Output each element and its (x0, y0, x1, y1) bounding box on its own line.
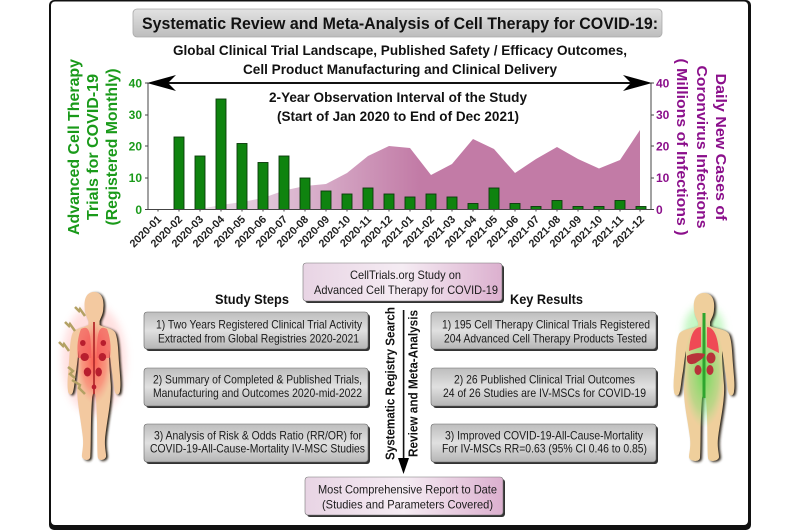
box: result 2 (431, 368, 658, 408)
left axis title: Trials for COVID-19 (85, 74, 102, 220)
month labels: 2021-09 (548, 214, 584, 250)
right axis numbers (656, 76, 670, 217)
month labels: 2021-03 (422, 214, 458, 250)
box: step 3: COVID-19-All-Cause-Mortality IV-MSC Studies (150, 442, 365, 456)
right axis title (673, 58, 729, 236)
month labels: 2020-12 (359, 214, 395, 250)
label: review and meta-analysis: Review and Meta-Analysis (406, 310, 420, 457)
right axis numbers: 40 (656, 76, 670, 90)
organs (687, 327, 719, 375)
box: result 3: 3) Improved COVID-19-All-Cause-Mortality (445, 428, 643, 442)
box: result 3: For IV-MSCs RR=0.63 (95% CI 0.46 to 0.85) (442, 442, 647, 456)
heading: key results: Key Results (510, 291, 583, 307)
left axis numbers: 20 (129, 140, 142, 154)
arrow: review flow (398, 310, 409, 474)
box: step 2 (144, 368, 370, 408)
left axis numbers (129, 76, 142, 217)
left axis numbers: 40 (129, 76, 142, 90)
box: step 2: Manufacturing and Outcomes 2020-mid-2022 (153, 386, 362, 400)
inflamed organs (80, 340, 106, 390)
box: result 2: 24 of 26 Studies are IV-MSCs for COVID-19 (443, 386, 646, 400)
subtitle: Global Clinical Trial Landscape, Published Safety / Efficacy Outcomes, (173, 42, 627, 58)
right axis numbers: 20 (656, 140, 670, 154)
icon: treated human body (674, 293, 736, 462)
month labels: 2020-06 (233, 214, 269, 250)
title (133, 9, 662, 37)
month labels: 2021-06 (485, 214, 521, 250)
box: step 2: 2) Summary of Completed & Published Trials, (153, 372, 362, 386)
month labels: 2020-05 (212, 214, 248, 250)
box: study source (303, 263, 504, 303)
box: step 1: Extracted from Global Registries 2020-2021 (158, 332, 359, 346)
right axis numbers: 30 (656, 108, 670, 122)
left axis title: (Registered Monthly) (104, 68, 121, 226)
box: result 3 (431, 424, 658, 464)
arrow: two-year interval (147, 75, 652, 91)
month labels: 2021-05 (464, 214, 500, 250)
box: conclusion: (Studies and Parameters Covered) (322, 498, 493, 512)
month labels: 2021-12 (611, 214, 647, 250)
box: conclusion: Most Comprehensive Report to Date (318, 482, 497, 496)
observation interval label: (Start of Jan 2020 to End of Dec 2021) (277, 108, 519, 124)
month labels: 2020-01 (128, 214, 164, 250)
right axis title: Coronvirus Infections (693, 66, 710, 228)
month labels: 2020-02 (149, 214, 185, 250)
inflamed torso (75, 320, 113, 404)
observation interval label: 2-Year Observation Interval of the Study (269, 89, 527, 105)
right axis title: Daily New Cases of (712, 74, 729, 222)
box: result 1: 1) 195 Cell Therapy Clinical Trials Registered (442, 318, 650, 332)
box: step 1 (144, 312, 370, 351)
box: study source: Advanced Cell Therapy for COVID-19 (314, 283, 498, 297)
green treated torso (683, 318, 725, 428)
right axis numbers: 0 (656, 203, 663, 217)
month labels: 2021-01 (380, 214, 416, 250)
left axis title: Advanced Cell Therapy (66, 59, 83, 235)
month labels: 2020-04 (191, 214, 227, 250)
left axis numbers: 30 (129, 108, 142, 122)
month labels: 2021-02 (401, 214, 437, 250)
label: systematic registry search: Systematic Registry Search (382, 307, 398, 460)
month labels: 2021-11 (590, 214, 626, 250)
left axis title (66, 59, 121, 235)
month labels: 2020-09 (296, 214, 332, 250)
month labels: 2021-08 (527, 214, 563, 250)
box: conclusion (305, 477, 505, 517)
box: step 3: 3) Analysis of Risk & Odds Ratio (RR/OR) for (154, 428, 362, 442)
observation interval label (269, 89, 527, 124)
chart: monthly trials and daily new cases (128, 76, 670, 250)
month labels: 2021-07 (506, 214, 542, 250)
month labels: 2021-04 (443, 214, 479, 250)
month labels: 2020-07 (254, 214, 290, 250)
title: Systematic Review and Meta-Analysis of Cell Therapy for COVID-19: (142, 15, 658, 33)
left axis numbers: 0 (135, 203, 142, 217)
box: study source: CellTrials.org Study on (350, 268, 461, 282)
right axis numbers: 10 (656, 171, 670, 185)
bar chart: registered trials (174, 99, 646, 210)
box: step 1: 1) Two Years Registered Clinical Trial Activity (156, 318, 362, 332)
left axis numbers: 10 (129, 171, 142, 185)
area chart: daily new cases (179, 130, 640, 210)
subtitle: Cell Product Manufacturing and Clinical Delivery (243, 61, 557, 77)
icon: infected human body (59, 292, 126, 461)
axes (145, 83, 654, 212)
month labels: 2020-11 (338, 214, 374, 250)
month labels (128, 214, 647, 250)
virus spikes (59, 307, 85, 394)
month labels: 2020-03 (170, 214, 206, 250)
box: step 3 (144, 424, 370, 464)
right axis title: ( Millions of Infections ) (673, 58, 690, 236)
box: result 1: 204 Advanced Cell Therapy Products Tested (444, 332, 647, 346)
box: result 2: 2) 26 Published Clinical Trial Outcomes (454, 372, 635, 386)
box: result 1 (431, 312, 658, 351)
month labels: 2021-10 (569, 214, 605, 250)
month labels: 2020-10 (317, 214, 353, 250)
subtitle (173, 42, 627, 77)
heading: study steps: Study Steps (215, 291, 289, 307)
month labels: 2020-08 (275, 214, 311, 250)
